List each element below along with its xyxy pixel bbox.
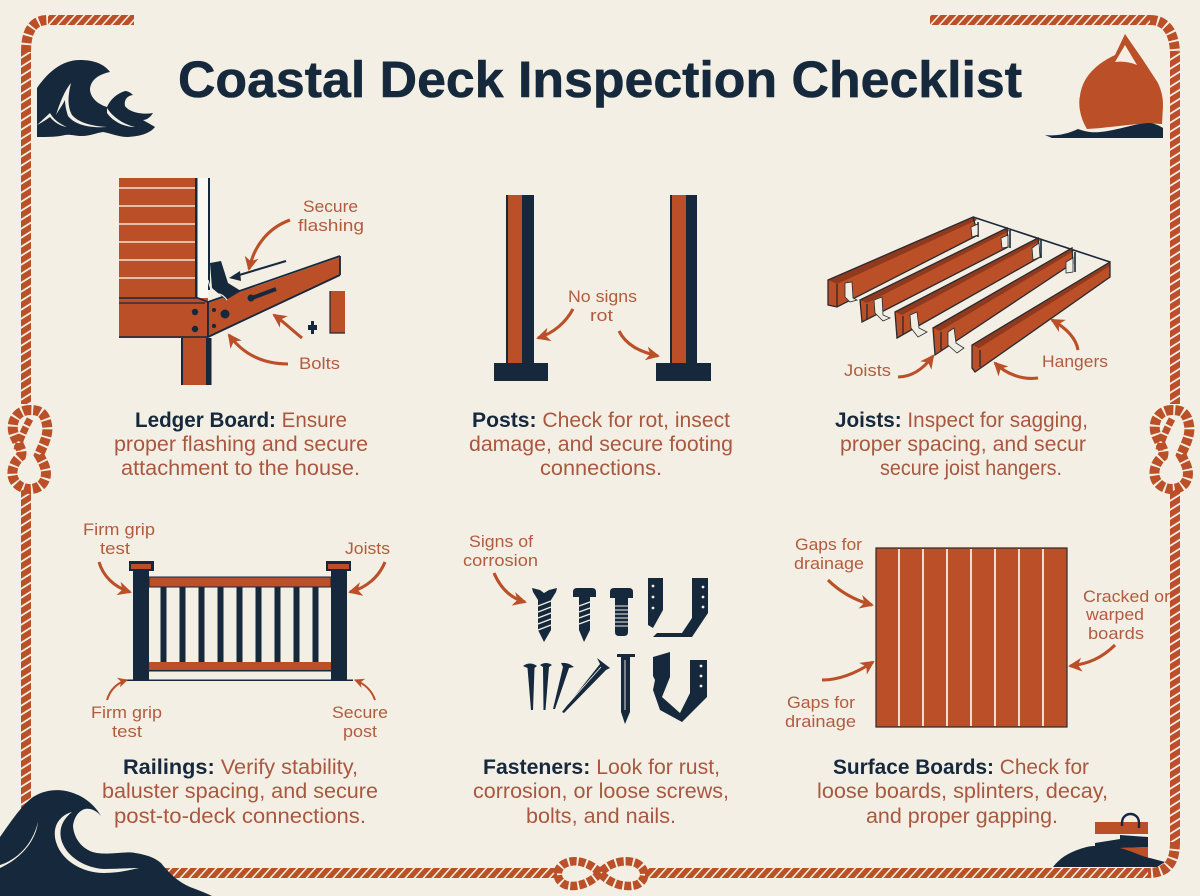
railing callouts: Secure [332,704,388,722]
ledger description: attachment to the house. [121,456,360,480]
railing callouts: test [112,723,142,741]
joists callouts: Joists [844,362,891,380]
ledger diagram [119,178,345,385]
railings description [102,755,378,828]
posts callouts: rot [590,307,613,325]
railing callouts: Firm grip [83,521,155,539]
railing callouts [83,521,390,741]
boards diagram [876,548,1067,727]
fasteners callout [463,533,538,602]
panel: fasteners [463,533,729,828]
panel: joists [828,217,1110,480]
title: Coastal Deck Inspection Checklist [178,51,1022,108]
ledger callouts [229,198,364,373]
boards callouts: Gaps for [795,536,863,554]
posts description [469,408,733,480]
boards callouts: Cracked or [1083,588,1171,606]
fasteners description: corrosion, or loose screws, [473,779,729,803]
boards callouts: boards [1088,625,1144,643]
boards description: Surface Boards: Check for [833,755,1089,779]
railings description: baluster spacing, and secure [102,779,378,803]
railing callouts: test [100,540,130,558]
boards description: and proper gapping. [866,804,1058,828]
railing callouts: post [343,723,377,741]
posts description: Posts: Check for rot, insect [472,408,730,432]
joists description: proper spacing, and secur [840,432,1086,456]
posts callouts: No signs [568,288,637,306]
right rope knot [1154,410,1189,489]
left rope knot [12,410,47,489]
fasteners description: bolts, and nails. [526,804,676,828]
panel: railings [83,521,390,828]
ledger description: Ledger Board: Ensure [135,408,347,432]
railings description: post-to-deck connections. [114,804,366,828]
boards description: loose boards, splinters, decay, [817,779,1108,803]
posts callouts [538,288,658,356]
ledger description [114,408,368,480]
panel: posts [469,195,733,480]
boards callouts: drainage [794,555,864,573]
posts diagram [494,195,711,381]
boards callouts: drainage [785,713,856,731]
posts description: damage, and secure footing [469,432,733,456]
ledger callouts: flashing [298,217,364,235]
ledger callouts: Bolts [299,355,340,373]
railing callouts: Firm grip [91,704,162,722]
joists description: secure joist hangers. [880,456,1062,480]
ledger description: proper flashing and secure [114,432,368,456]
boards description [817,755,1108,828]
railing diagram [127,561,353,681]
boards callouts [785,536,1171,731]
joists description [835,408,1088,480]
icon: top-left wave [37,60,155,137]
joists description: Joists: Inspect for sagging, [835,408,1088,432]
fasteners description: Fasteners: Look for rust, [483,755,720,779]
bottom rope knot [558,861,644,886]
joists diagram [828,217,1110,372]
joists callouts [844,320,1108,380]
icon: bottom-right dock [1053,814,1165,867]
fasteners callout: corrosion [463,552,538,570]
railing callouts: Joists [345,540,390,558]
icon: buoy [1045,34,1163,138]
fasteners icons [523,578,708,724]
icon: bottom-left wave [0,790,212,896]
fasteners description [473,755,729,828]
boards callouts: Gaps for [787,694,856,712]
railings description: Railings: Verify stability, [123,755,358,779]
panel: surface boards [785,536,1171,828]
boards callouts: warped [1085,606,1144,624]
posts description: connections. [540,456,662,480]
joists callouts: Hangers [1042,353,1108,371]
panel: ledger board [114,178,368,480]
fasteners callout: Signs of [469,533,533,551]
ledger callouts: Secure [303,198,358,216]
